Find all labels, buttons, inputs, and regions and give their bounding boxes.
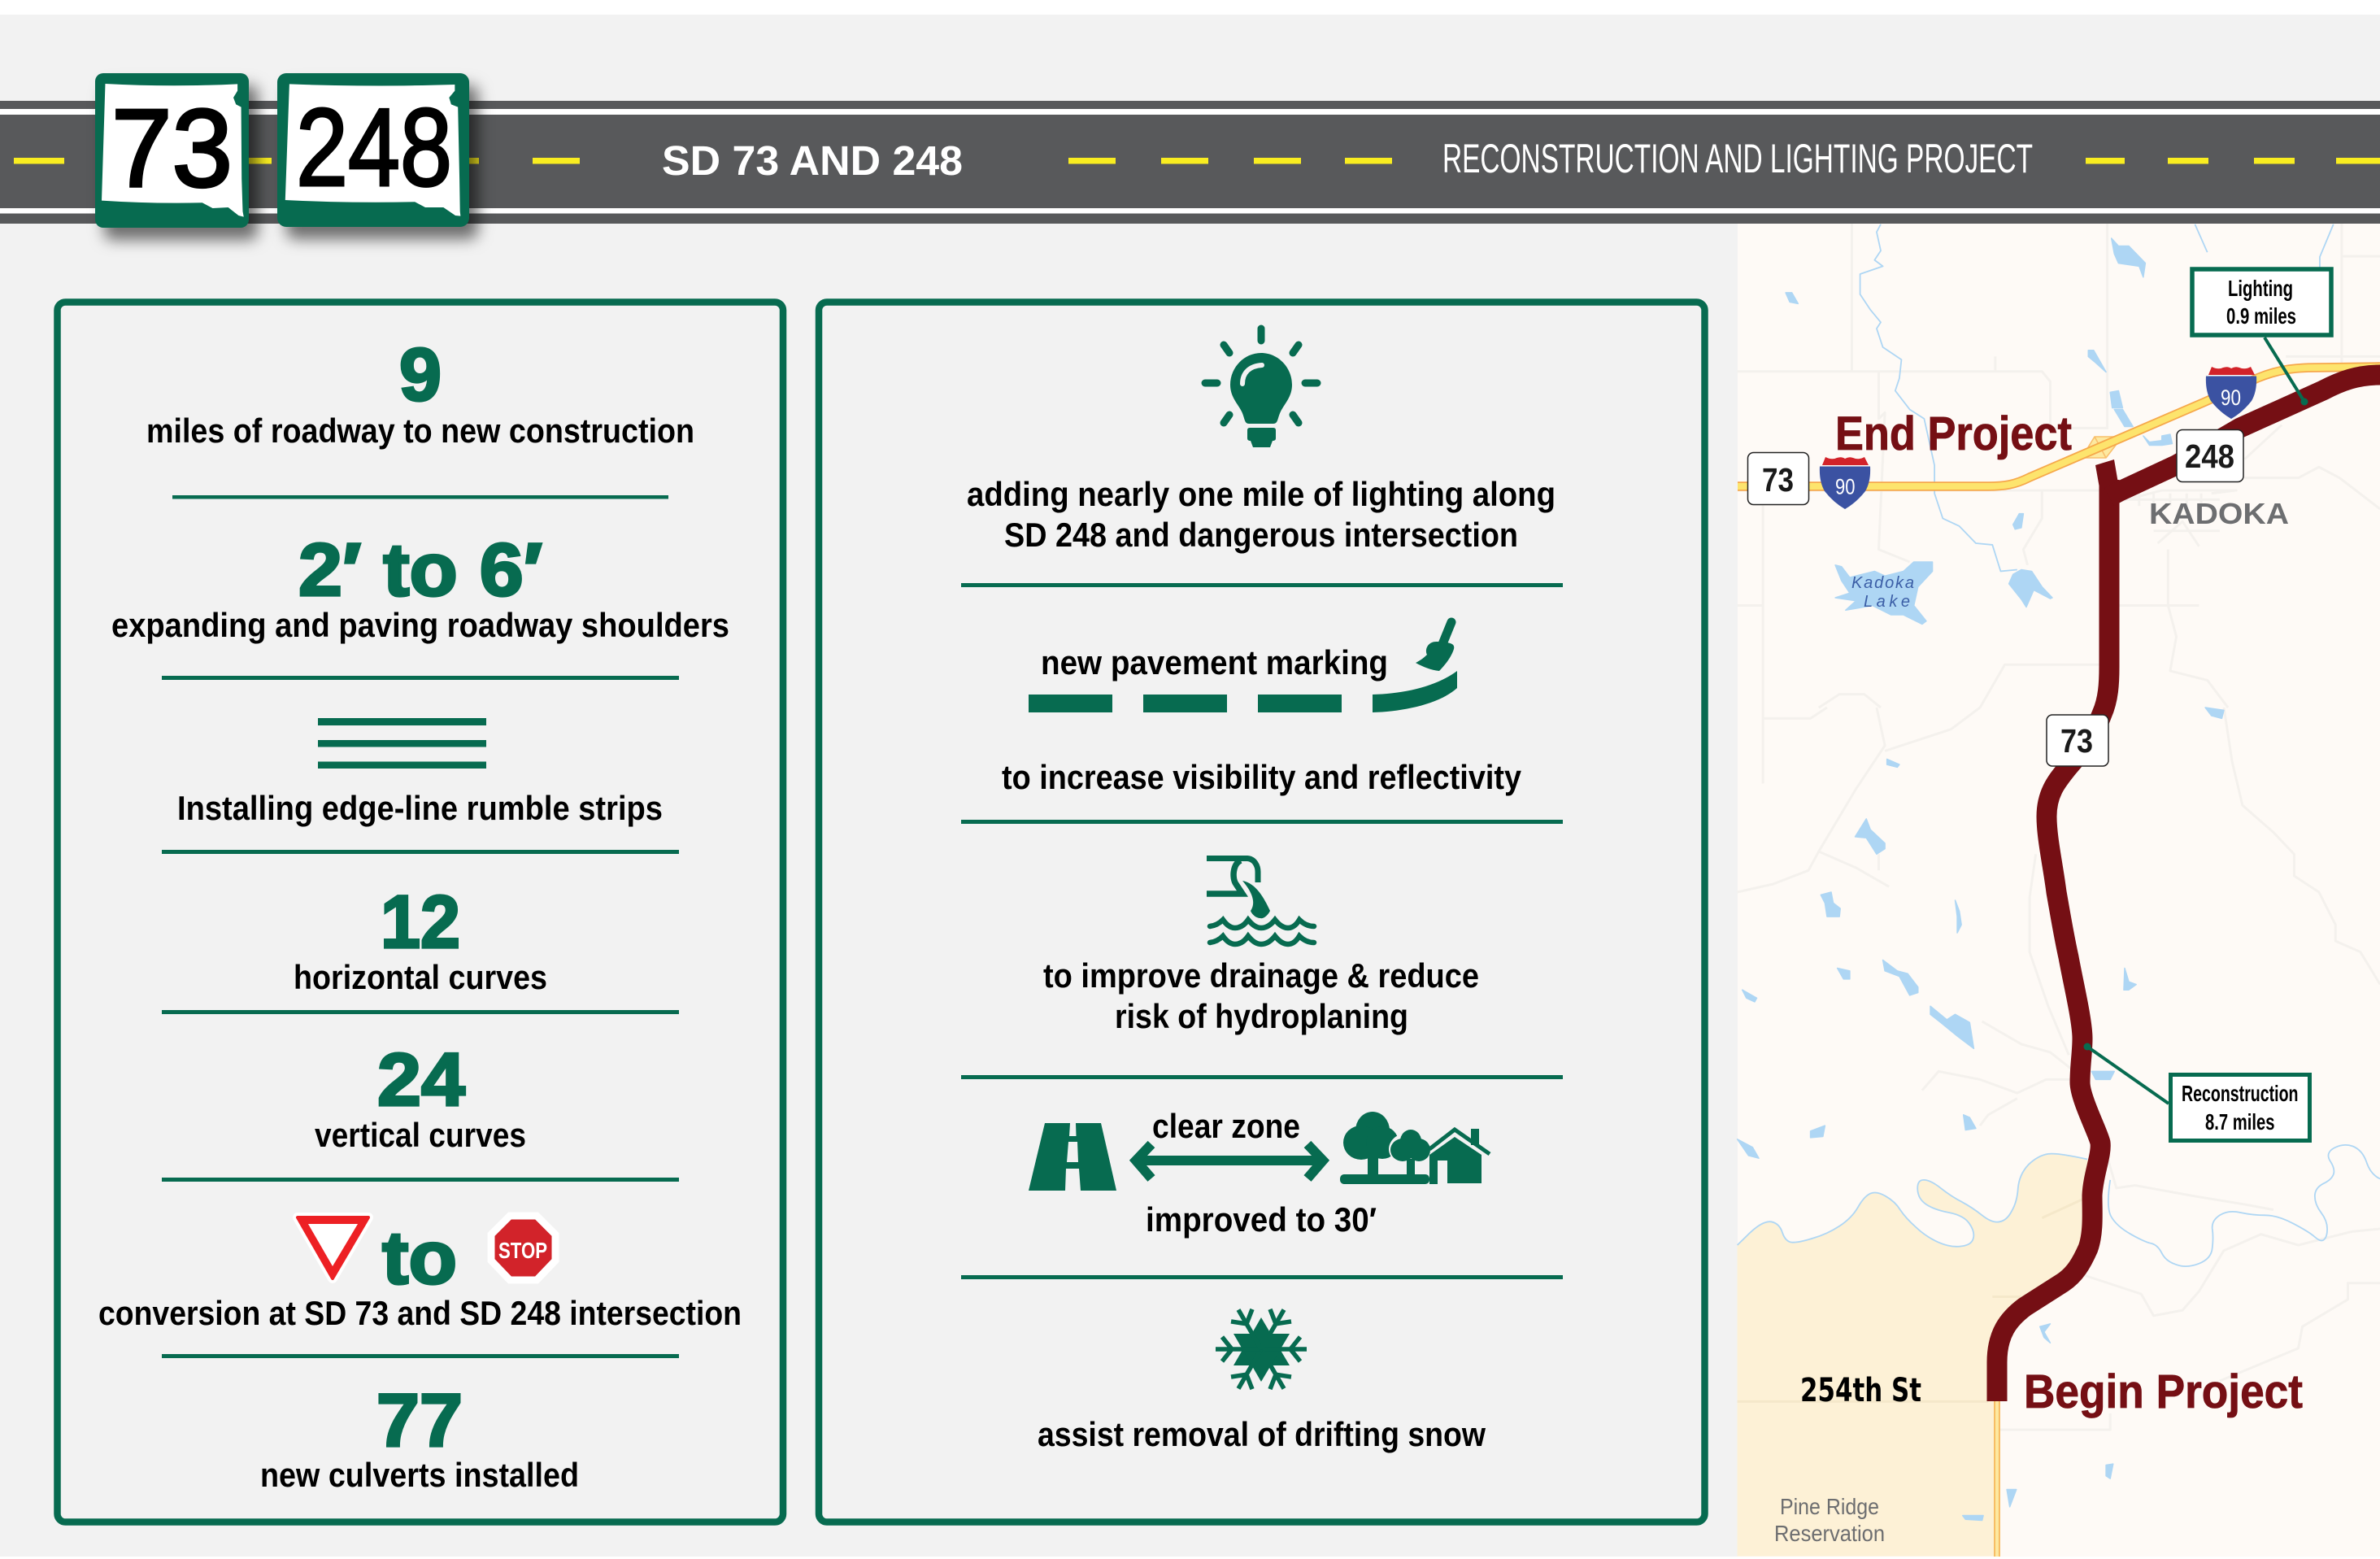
- label: Kadoka town: KADOKA: [2149, 497, 2289, 530]
- route sign: 73 south: [2047, 715, 2108, 766]
- benefit: clear zone: [1029, 1107, 1490, 1239]
- interstate shield: 90 east: 90: [2221, 385, 2241, 410]
- benefit: pavement marking: to increase visibility and reflectivity: [1002, 758, 1522, 796]
- minor roads and water, north section: [1738, 220, 2380, 708]
- stat: culverts: [260, 1379, 579, 1494]
- header road band: [0, 101, 2380, 224]
- benefit: snow removal: assist removal of drifting snow: [1038, 1415, 1486, 1453]
- orange south road: [1995, 1401, 1999, 1557]
- reservation area: [1738, 1154, 2094, 1557]
- benefit: clear zone: improved to 30′: [1146, 1200, 1377, 1239]
- label: End Project: End Project: [1835, 407, 2072, 460]
- label: Pine Ridge Reservation: [1774, 1494, 1885, 1546]
- benefit: drainage: risk of hydroplaning: [1115, 997, 1408, 1035]
- benefit: pavement marking: [1002, 622, 1522, 796]
- river: [1738, 1154, 2087, 1247]
- panel: project benefits: [819, 303, 1704, 1522]
- icon: painted dashes and brush: [1029, 622, 1457, 712]
- callout: reconstruction: [2083, 1043, 2309, 1140]
- stat: culverts: 77: [376, 1379, 463, 1462]
- benefit: lighting: SD 248 and dangerous intersection: [1004, 516, 1518, 554]
- stat: shoulders: expanding and paving roadway shoulders: [111, 606, 729, 644]
- stat: 9 miles: [146, 333, 694, 450]
- stat: 9 miles: miles of roadway to new construction: [146, 412, 694, 450]
- benefit: lighting: adding nearly one mile of lighting along: [967, 475, 1555, 513]
- stat: vertical curves: vertical curves: [315, 1116, 526, 1154]
- interstate shield: 90 west: 90: [1835, 475, 1856, 499]
- benefit: clear zone: clear zone: [1152, 1107, 1300, 1145]
- callout: lighting: [2192, 269, 2331, 405]
- callout: lighting: 0.9 miles: [2226, 303, 2296, 329]
- stat: horizontal curves: [294, 881, 547, 996]
- reservation area, roads and water, south section: [1738, 708, 2380, 1557]
- interstate shield: 90 east: [2206, 367, 2256, 419]
- label: Kadoka Lake: Lake: [1864, 593, 1910, 611]
- stat: vertical curves: [315, 1039, 526, 1154]
- icon: trees and house: [1340, 1112, 1490, 1184]
- icon: drainage pipe: [1207, 859, 1314, 944]
- stat: culverts: new culverts installed: [260, 1456, 579, 1494]
- stat: yield to stop conversion: to: [382, 1217, 457, 1300]
- project route: [1997, 375, 2380, 1401]
- route sign: 73 west: [1748, 452, 1808, 504]
- header subtitle: RECONSTRUCTION AND LIGHTING PROJECT: [1442, 136, 2033, 181]
- icon: snowflake: [1216, 1304, 1307, 1395]
- route sign: 73 west: 73: [1762, 461, 1794, 499]
- Interstate 90: [1738, 367, 2380, 486]
- label: Begin Project: Begin Project: [2024, 1365, 2303, 1418]
- icon: yield sign: [298, 1217, 368, 1278]
- panel: project statistics: [57, 303, 783, 1522]
- route sign: 73 south: 73: [2060, 722, 2093, 760]
- callout: reconstruction: 8.7 miles: [2205, 1109, 2275, 1134]
- label: 254th St: 254th St: [1800, 1372, 1921, 1409]
- interstate shield: 90 west: [1820, 457, 1870, 509]
- stat: shoulders: [111, 529, 729, 644]
- highway sign: SD 248: [277, 73, 469, 227]
- highway sign: SD 73: [95, 73, 249, 228]
- icon: stop sign: [491, 1216, 555, 1280]
- highway sign: SD 248: 248: [296, 85, 452, 209]
- callout: reconstruction: Reconstruction: [2182, 1081, 2298, 1106]
- map panel: [1738, 220, 2380, 1557]
- yellow centre dashes: [14, 158, 2380, 164]
- icon: stop sign: STOP: [498, 1238, 547, 1263]
- arrow: clear zone span: [1136, 1144, 1323, 1178]
- benefit: lighting: [967, 329, 1555, 554]
- label: Pine Ridge Reservation: Reservation: [1774, 1521, 1885, 1546]
- stat: yield to stop conversion: [98, 1216, 742, 1332]
- callout: lighting: Lighting: [2228, 276, 2293, 301]
- stat: horizontal curves: horizontal curves: [294, 958, 547, 996]
- benefit: pavement marking: new pavement marking: [1041, 643, 1388, 682]
- stat: horizontal curves: 12: [381, 881, 460, 964]
- route sign: 248: [2177, 429, 2243, 481]
- icon: rumble strips: [318, 718, 486, 769]
- benefit: snow removal: [1038, 1304, 1486, 1453]
- label: Kadoka Lake: [1851, 574, 1914, 611]
- route sign: 248: 248: [2185, 438, 2234, 475]
- icon: road: [1029, 1123, 1116, 1191]
- stat: vertical curves: 24: [377, 1039, 465, 1121]
- label: Pine Ridge Reservation: Pine Ridge: [1780, 1494, 1879, 1519]
- label: Kadoka Lake: Kadoka: [1851, 574, 1914, 592]
- icon: light bulb: [1205, 329, 1317, 447]
- Kadoka Lake: [1835, 562, 1933, 625]
- stat: yield to stop conversion: conversion at SD 73 and SD 248 intersection: [98, 1294, 742, 1332]
- stat: rumble strips: Installing edge-line rumble strips: [177, 789, 663, 827]
- stat: 9 miles: 9: [399, 333, 442, 416]
- highway sign: SD 73: 73: [111, 86, 233, 210]
- benefit: drainage: to improve drainage & reduce: [1043, 956, 1479, 995]
- benefit: drainage: [1043, 859, 1479, 1035]
- stat: shoulders: 2′ to 6′: [298, 529, 542, 612]
- header title: SD 73 AND 248: [662, 137, 963, 184]
- stat: rumble strips: [177, 718, 663, 827]
